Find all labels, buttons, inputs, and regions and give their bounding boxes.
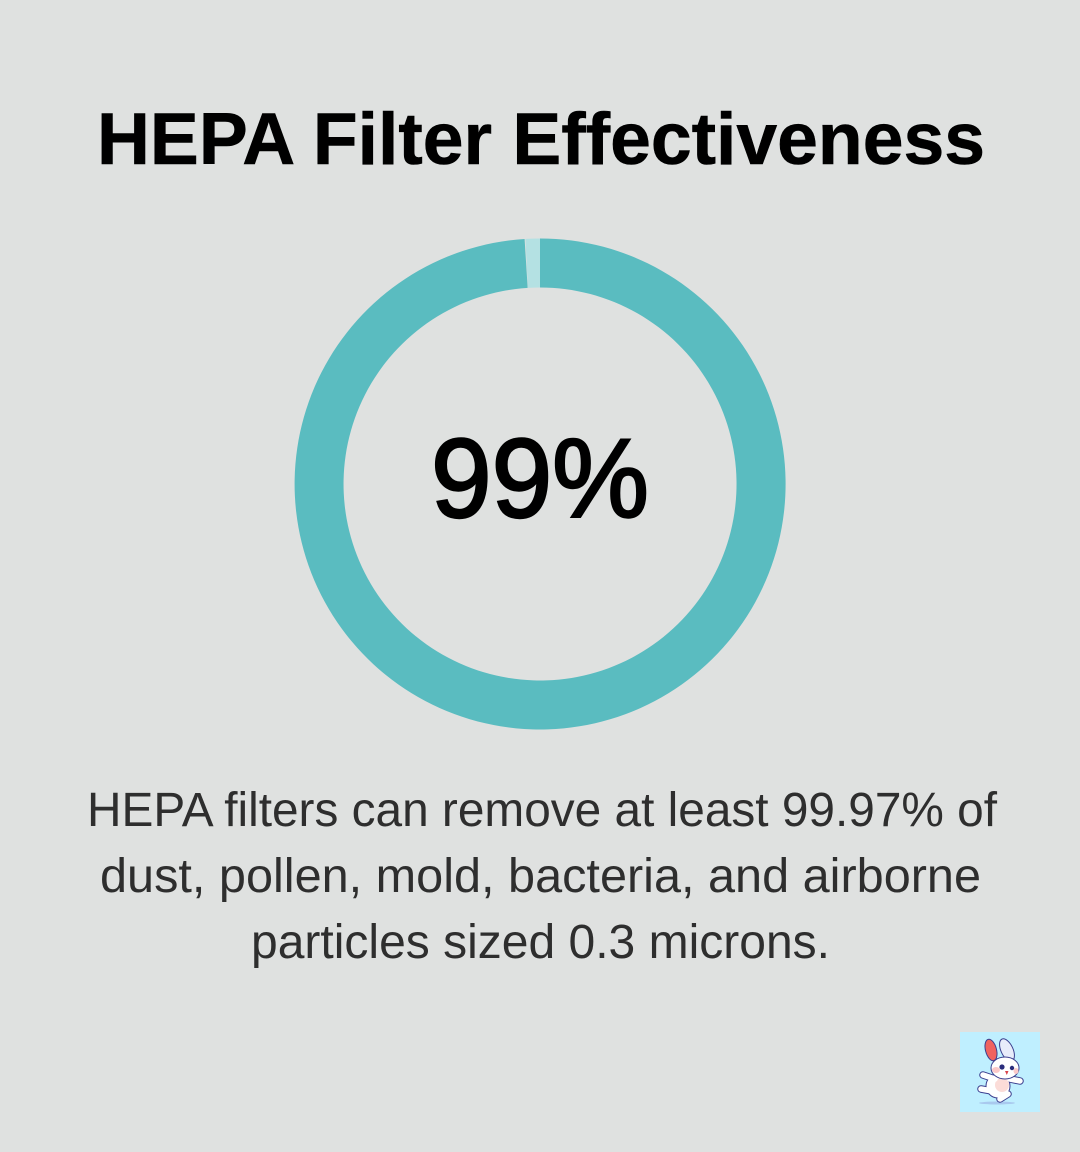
- limbs fill: [981, 1075, 1020, 1099]
- description text: particles sized 0.3 microns.: [251, 916, 830, 969]
- description text: HEPA filters can remove at least 99.97% of: [87, 784, 998, 837]
- donut segment: remaining 1%: [525, 238, 540, 288]
- description text: [87, 784, 998, 969]
- donut segment: 99%: [295, 238, 786, 729]
- donut center value: 99%: [431, 416, 649, 541]
- body: [986, 1074, 1010, 1098]
- icon: running rabbit logo: [960, 1032, 1040, 1112]
- left ear: [983, 1038, 999, 1062]
- right ear: [996, 1037, 1018, 1063]
- head: [991, 1057, 1019, 1079]
- donut chart: 99%: [295, 238, 786, 729]
- title: HEPA Filter Effectiveness: [97, 99, 985, 180]
- description text: dust, pollen, mold, bacteria, and airborne: [100, 850, 981, 903]
- limbs outline: [981, 1075, 1020, 1099]
